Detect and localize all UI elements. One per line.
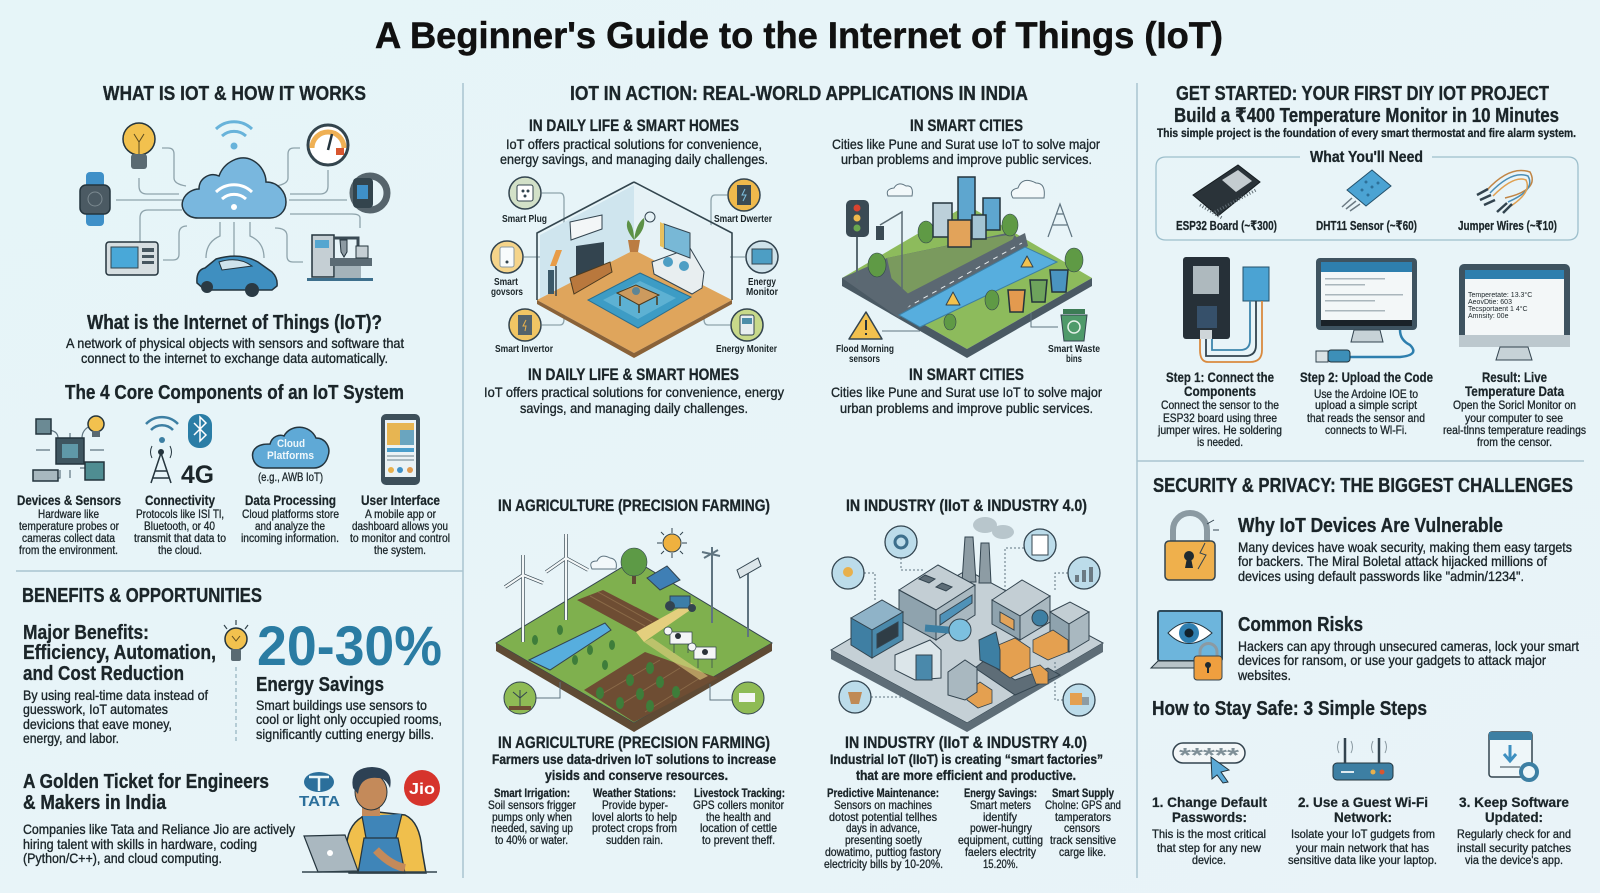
- text: daily life description: IN DAILY LIFE & SMART HOMES: [528, 365, 739, 384]
- icon: ESP32 board: [1193, 165, 1260, 218]
- text: smart supply chain: tamperators: [1055, 810, 1111, 824]
- text: change passwords: that step for any new: [1157, 841, 1261, 855]
- text: weather stations: lovel alorts to help: [592, 810, 677, 824]
- text: smart cities intro: [832, 116, 1100, 167]
- cows: [664, 627, 716, 668]
- icon: password field: [1173, 743, 1245, 783]
- text: energy savings: Energy Savings:: [964, 786, 1037, 800]
- callout: energy monitor: [746, 241, 778, 273]
- text: daily life intro: energy savings, and managing daily challenges.: [500, 151, 768, 167]
- text: livestock tracking: to prevent theff.: [702, 833, 775, 847]
- text: smart irrigation: to 40% or water.: [495, 833, 568, 847]
- logo: Jio: Jio: [409, 781, 435, 798]
- text: definition: connect to the internet to exchange data automatically.: [81, 350, 388, 366]
- AC: [570, 215, 602, 240]
- grey cabinet: [948, 660, 977, 700]
- stat: energy savings: Energy Savings: [256, 674, 384, 696]
- icon: smartwatch right: [353, 176, 387, 210]
- stat: energy savings: significantly cutting energy bills.: [256, 726, 434, 742]
- text: major benefits: Efficiency, Automation,: [23, 642, 216, 664]
- plant: [627, 218, 644, 252]
- text: daily life intro: [500, 116, 768, 167]
- text: result: from the censor.: [1477, 435, 1552, 449]
- illustration: smart factory: [831, 517, 1103, 732]
- buildings: [933, 177, 1000, 247]
- text: industry description: [830, 733, 1103, 783]
- text: smart supply chain: censors: [1064, 821, 1100, 835]
- text: daily life intro: IoT offers practical solutions for convenience,: [506, 136, 762, 152]
- labels: parts: DHT11 Sensor (~₹60): [1316, 218, 1417, 233]
- illustration: result monitor: AeovDtie: 603: [1468, 299, 1512, 306]
- text: energy savings: identify: [983, 810, 1017, 824]
- stat: energy savings: cool or light only occupied rooms,: [256, 711, 442, 727]
- heading: what is IoT: WHAT IS IOT & HOW IT WORKS: [103, 83, 366, 105]
- text: energy savings: faelers electrity: [965, 845, 1036, 859]
- stat: energy savings: Smart buildings use sensors to: [256, 697, 427, 713]
- text: predictive maintenance: electricity bills by 10-20%.: [824, 857, 943, 871]
- text: devices and sensors: Devices & Sensors: [17, 492, 121, 508]
- text: smart irrigation: pumps only when: [492, 810, 572, 824]
- text: agriculture description: yisids and conserve resources.: [545, 767, 728, 783]
- panel: benefits and opportunities: [22, 585, 442, 873]
- panel: what is IoT: [17, 83, 450, 557]
- text: energy savings: Smart meters: [970, 798, 1031, 812]
- text: livestock tracking: the health and: [706, 810, 771, 824]
- text: user interface: dashboard allows you: [352, 519, 448, 533]
- text: predictive maintenance: dowatimo, puttiog fastory: [825, 845, 941, 859]
- text: major benefits: and Cost Reduction: [23, 663, 184, 685]
- text: step 2: Step 2: Upload the Code: [1300, 369, 1433, 385]
- text: why vulnerable: [1238, 515, 1572, 584]
- text: golden ticket: & Makers in India: [23, 792, 167, 814]
- labels: smart city: sensors: [849, 353, 880, 365]
- main factory block: [899, 565, 975, 640]
- text: change passwords: Passwords:: [1172, 809, 1247, 825]
- text: golden ticket: hiring talent with skills in hardware, coding: [23, 836, 257, 852]
- text: daily life intro: IN DAILY LIFE & SMART HOMES: [529, 116, 739, 135]
- text: smart cities intro: IN SMART CITIES: [910, 116, 1023, 135]
- text: change passwords: [1152, 794, 1267, 867]
- text: guest wifi: Network:: [1334, 809, 1392, 825]
- callout: smart invertor: [509, 309, 541, 341]
- text: smart supply chain: [1045, 786, 1121, 859]
- text: change passwords: 1. Change Default: [1152, 794, 1267, 810]
- illustration: IoT network hub: [80, 122, 387, 297]
- text: industry description: Industrial IoT (IIoT) is creating “smart factories”: [830, 751, 1103, 767]
- icon: gauge: [308, 125, 348, 165]
- text: smart cities description: IN SMART CITIES: [909, 365, 1024, 384]
- text: data processing: Cloud platforms store: [242, 507, 339, 521]
- heading: IoT in action: IOT IN ACTION: REAL-WORLD APPLICATIONS IN INDIA: [570, 83, 1028, 105]
- icon: router: [1333, 738, 1393, 780]
- icon: wifi: [216, 122, 252, 136]
- illustration: result monitor: Tecsportaent 1 4°C: [1468, 305, 1528, 313]
- text: step 1: Components: [1184, 383, 1256, 399]
- text: devices and sensors: temperature probes or: [19, 519, 119, 533]
- text: smart cities description: Cities like Pune and Surat use IoT to solve major: [831, 384, 1102, 400]
- text: change passwords: device.: [1192, 853, 1226, 867]
- left machine: [851, 600, 903, 658]
- text: livestock tracking: GPS collers monitor: [693, 798, 784, 812]
- text: smart irrigation: [488, 786, 576, 847]
- heading: industry: IN INDUSTRY (IIoT & INDUSTRY 4.0): [846, 496, 1087, 515]
- text: daily life description: [484, 365, 784, 416]
- text: golden ticket: (Python/C++), and cloud computing.: [23, 850, 222, 866]
- pipeline: [925, 628, 970, 632]
- text: step 1: ESP32 board using three: [1163, 411, 1277, 425]
- icon: control device: [106, 242, 158, 275]
- weather poles: [702, 547, 748, 637]
- labels: smart city: Smart Waste: [1048, 343, 1100, 355]
- right machines: [992, 580, 1089, 652]
- text: connectivity: Protocols like ISI Tl,: [136, 507, 224, 521]
- text: guest wifi: Isolate your IoT gudgets from: [1291, 827, 1435, 841]
- labels: parts: ESP32 Board (~₹300): [1176, 218, 1277, 233]
- text: smart cities intro: Cities like Pune and Surat use IoT to solve major: [832, 136, 1100, 152]
- title: A Beginner's Guide to the Internet of Things (IoT): [375, 15, 1223, 56]
- text: predictive maintenance: presenting soetly: [845, 833, 922, 847]
- text: guest wifi: 2. Use a Guest Wi-Fi: [1298, 794, 1428, 810]
- text: user interface: the system.: [374, 543, 426, 557]
- text: livestock tracking: Livestock Tracking:: [694, 786, 785, 800]
- sofa: [652, 248, 704, 294]
- text: smart irrigation: Smart Irrigation:: [494, 786, 570, 800]
- text: agriculture description: [492, 733, 776, 783]
- labels: parts: Jumper Wires (~₹10): [1458, 218, 1557, 233]
- text: weather stations: sudden rain.: [606, 833, 663, 847]
- icon: phone interface: [381, 414, 420, 485]
- callout: energy moniter: [731, 309, 763, 341]
- panel: security and privacy: [1151, 475, 1579, 867]
- crops: [532, 625, 680, 712]
- text: keep updated: [1457, 794, 1571, 867]
- text: step 2: connects to Wl-Fi.: [1325, 423, 1407, 437]
- text: common risks: devices for ransom, or use your gadgets to attack major: [1238, 652, 1546, 668]
- text: energy savings: equipment, cutting: [958, 833, 1043, 847]
- logo: Jio: [404, 770, 440, 806]
- text: major benefits: [23, 622, 216, 746]
- tree: [621, 548, 647, 584]
- text: step 1: Step 1: Connect the: [1166, 369, 1274, 385]
- labels: smart home: Smart: [494, 276, 518, 288]
- text: weather stations: protect crops from: [592, 821, 677, 835]
- icon: smartwatch left: [80, 172, 110, 226]
- text: common risks: websites.: [1237, 667, 1291, 683]
- heading: stay safe: How to Stay Safe: 3 Simple Steps: [1152, 698, 1427, 720]
- tractor: [665, 596, 696, 612]
- labels: smart home: Smart Dwerter: [714, 213, 772, 225]
- text: predictive maintenance: dotost potential tellhes: [829, 810, 937, 824]
- text: step 2: [1300, 369, 1433, 437]
- panel: what you'll need: [1156, 149, 1578, 240]
- text: step 1: Connect the sensor to the: [1161, 398, 1279, 412]
- labels: smart home: Monitor: [746, 286, 778, 298]
- illustration: smart home: [491, 177, 778, 358]
- illustration: result monitor: Temperetate: 13.3°C: [1468, 291, 1532, 299]
- text: smart supply chain: Cholne: GPS and: [1045, 798, 1121, 812]
- icon: software update: [1489, 732, 1537, 780]
- text: devices and sensors: from the environment.: [19, 543, 118, 557]
- text: weather stations: Provide byper-: [602, 798, 668, 812]
- text: weather stations: Weather Stations:: [593, 786, 676, 800]
- text: energy savings: [958, 786, 1043, 871]
- text: result: your computer to see: [1465, 411, 1563, 425]
- orange crates: [967, 630, 1068, 708]
- panel: IoT in action: [484, 83, 1121, 871]
- warnings: [946, 256, 1033, 305]
- text: connectivity: the cloud.: [158, 543, 202, 557]
- wall art: [645, 212, 690, 258]
- icon: devices and sensors: [33, 416, 104, 481]
- heading: what you'll need: What You'll Need: [1310, 149, 1423, 166]
- icon: car: [197, 256, 277, 297]
- text: major benefits: By using real-time data instead of: [23, 687, 208, 703]
- text: golden ticket: Companies like Tata and Reliance Jio are actively: [23, 821, 295, 837]
- icon: industrial machine: [307, 235, 373, 281]
- text: guest wifi: your main network that has: [1296, 841, 1429, 855]
- text: weather stations: [592, 786, 677, 847]
- heading: benefits: BENEFITS & OPPORTUNITIES: [22, 585, 262, 607]
- text: agriculture description: IN AGRICULTURE (PRECISION FARMING): [498, 733, 770, 752]
- text: smart irrigation: needed, saving up: [491, 821, 573, 835]
- icon: password field: *****: [1179, 745, 1239, 767]
- text: data processing: [241, 492, 339, 545]
- text: major benefits: devicions that eave money,: [23, 716, 172, 732]
- callout: smart plug: [509, 177, 541, 209]
- text: result: [1443, 369, 1586, 449]
- icon: connectivity: [146, 414, 214, 489]
- text: keep updated: Regularly check for and: [1457, 827, 1571, 841]
- tower: [1048, 204, 1072, 237]
- icon: jumper wires: [1477, 170, 1532, 213]
- labels: smart city: [836, 343, 1100, 365]
- text: smart cities description: [831, 365, 1102, 416]
- labels: smart home: Energy Moniter: [716, 343, 777, 355]
- icon: connectivity: 4G: [181, 461, 214, 489]
- text: data processing: Data Processing: [245, 492, 336, 508]
- icon: laptop with eye: [1151, 611, 1222, 680]
- smart bins: [1008, 270, 1068, 312]
- callout: waste bin: [1031, 309, 1087, 341]
- labels: smart home: [491, 213, 778, 355]
- text: connectivity: Connectivity: [145, 492, 215, 508]
- text: energy savings: power-hungry: [970, 821, 1032, 835]
- text: keep updated: install security patches: [1457, 841, 1571, 855]
- text: user interface: to monitor and control: [350, 531, 450, 545]
- rug and table: [588, 273, 691, 328]
- icon: DHT11 sensor: [1342, 170, 1391, 211]
- callout: livestock: [710, 682, 764, 714]
- panel: DIY project: [1156, 83, 1586, 449]
- text: predictive maintenance: days in advance,: [846, 821, 920, 835]
- text: common risks: [1237, 614, 1579, 683]
- callout: smart dwerter: [728, 179, 760, 211]
- river: [529, 623, 611, 670]
- smokestacks and smoke: [962, 517, 1014, 583]
- text: devices and sensors: [17, 492, 121, 557]
- text: definition: [66, 335, 404, 366]
- conveyor: [975, 660, 1060, 695]
- text: why vulnerable: devices using default passwords like "admin/1234".: [1238, 568, 1524, 584]
- dashed connectors: [864, 548, 1068, 700]
- text: result: Temperature Data: [1465, 383, 1564, 399]
- text: smart supply chain: track sensitive: [1050, 833, 1116, 847]
- trees: [868, 214, 1083, 330]
- text: energy savings: 15.20%.: [983, 857, 1018, 871]
- logo: Tata: TATA: [299, 793, 340, 810]
- illustration: step 1 wiring: [1183, 257, 1269, 362]
- illustration: step 2 upload: [1316, 258, 1417, 362]
- text: industry description: IN INDUSTRY (IIoT & INDUSTRY 4.0): [845, 733, 1087, 752]
- icon: central cloud: [182, 158, 286, 218]
- icon: broken padlock: [1165, 513, 1219, 580]
- text: definition: A network of physical objects with sensors and software that: [66, 335, 404, 351]
- icon: cloud platforms: [252, 427, 329, 484]
- logo: Tata: [299, 772, 340, 810]
- text: step 1: jumper wires. He soldering: [1157, 423, 1282, 437]
- text: keep updated: via the device's app.: [1465, 853, 1563, 867]
- traffic light: [846, 200, 902, 290]
- text: smart cities description: urban problems and improve public services.: [840, 400, 1093, 416]
- truck: [979, 632, 1000, 670]
- text: livestock tracking: [693, 786, 785, 847]
- sensor badges: [832, 526, 1100, 716]
- text: step 2: Use the Ardoine IOE to: [1314, 387, 1418, 401]
- labels: parts: [1176, 218, 1557, 233]
- stat: energy savings: [256, 614, 442, 742]
- labels: smart city: Flood Morning: [836, 343, 894, 355]
- icon: bulb: [123, 123, 155, 169]
- text: step 2: upload a simple script: [1315, 398, 1418, 412]
- icon: cloud platforms: (e.g., AWB IoT): [258, 470, 323, 484]
- text: step 1: [1157, 369, 1282, 449]
- text: smart supply chain: carge like.: [1059, 845, 1106, 859]
- text: definition heading: What is the Internet of Things (IoT)?: [87, 312, 382, 334]
- text: connectivity: [134, 492, 226, 557]
- text: golden ticket: A Golden Ticket for Engineers: [23, 771, 269, 793]
- text: guest wifi: [1288, 794, 1437, 867]
- text: major benefits: energy, and labor.: [23, 730, 119, 746]
- text: industry description: that are more efficient and productive.: [856, 767, 1076, 783]
- solar panel: [647, 566, 680, 590]
- cloud: [591, 556, 616, 569]
- wind turbines: [505, 534, 588, 642]
- sun: [657, 528, 687, 558]
- text: smart cities intro: urban problems and improve public services.: [841, 151, 1092, 167]
- text: data processing: incoming information.: [241, 531, 339, 545]
- callout: crop sensor: [504, 682, 560, 714]
- text: connectivity: transmit that data to: [134, 531, 226, 545]
- text: predictive maintenance: Sensors on machines: [834, 798, 932, 812]
- floor lamp: [548, 250, 562, 296]
- heading: core components: The 4 Core Components of an IoT System: [65, 382, 404, 404]
- text: why vulnerable: for backers. The Miral Boletal attack hijacked millions of: [1238, 553, 1547, 569]
- stat: energy savings: 20-30%: [257, 614, 442, 677]
- text: connectivity: Bluetooth, or 40: [144, 519, 215, 533]
- illustration: smart city: [836, 177, 1100, 365]
- river: [899, 247, 1057, 327]
- text: predictive maintenance: [824, 786, 943, 871]
- text: golden ticket: [23, 771, 295, 866]
- soil fields: [584, 652, 718, 722]
- text: livestock tracking: location of cettle: [700, 821, 777, 835]
- labels: smart home: govsors: [491, 286, 523, 298]
- labels: smart home: Smart Plug: [502, 213, 547, 225]
- text: step 2: that reads the sensor and: [1307, 411, 1425, 425]
- icon: cloud platforms: Cloud: [277, 438, 305, 450]
- icon: idea bulb: [224, 620, 248, 742]
- text: daily life description: savings, and managing daily challenges.: [520, 400, 748, 416]
- text: user interface: [350, 492, 450, 557]
- text: why vulnerable: Why IoT Devices Are Vulnerable: [1238, 515, 1503, 537]
- text: guest wifi: sensitive data like your laptop.: [1288, 853, 1437, 867]
- text: result: Result: Live: [1482, 369, 1547, 385]
- illustration: precision farming: [496, 528, 772, 732]
- text: user interface: User Interface: [361, 492, 440, 508]
- text: result: Open the Soricl Monitor on: [1453, 398, 1576, 412]
- road: [842, 232, 1025, 318]
- labels: smart city: bins: [1066, 353, 1082, 365]
- text: predictive maintenance: Predictive Maintenance:: [827, 786, 939, 800]
- callout: flood warning: [849, 312, 920, 339]
- icon: cloud platforms: Platforms: [267, 450, 314, 462]
- text: daily life description: IoT offers practical solutions for convenience, energy: [484, 384, 784, 400]
- text: devices and sensors: Hardware like: [38, 507, 99, 521]
- text: change passwords: This is the most critical: [1152, 827, 1266, 841]
- illustration: engineer with laptop: [302, 767, 437, 873]
- text: major benefits: guesswork, IoT automates: [23, 701, 168, 717]
- illustration: result monitor: Amnsity: 00e: [1468, 313, 1509, 320]
- heading: agriculture: IN AGRICULTURE (PRECISION FARMING): [498, 496, 770, 515]
- text: smart supply chain: Smart Supply: [1052, 786, 1114, 800]
- labels: smart home: Energy: [748, 276, 776, 288]
- text: agriculture description: Farmers use data-driven IoT solutions to increase: [492, 751, 776, 767]
- text: data processing: and analyze the: [255, 519, 325, 533]
- robot arm: [895, 640, 941, 680]
- labels: smart home: Smart Invertor: [495, 343, 553, 355]
- illustration: result monitor: [1459, 264, 1570, 360]
- text: user interface: A mobile app or: [365, 507, 436, 521]
- text: devices and sensors: cameras collect data: [22, 531, 115, 545]
- text: keep updated: Updated:: [1485, 809, 1543, 825]
- clouds: [887, 180, 1044, 198]
- text: major benefits: Major Benefits:: [23, 622, 149, 644]
- TV unit: [570, 242, 612, 294]
- callout: smart govsors: [491, 241, 523, 273]
- text: smart irrigation: Soil sensors frigger: [488, 798, 576, 812]
- text: common risks: Common Risks: [1238, 614, 1363, 636]
- text: keep updated: 3. Keep Software: [1459, 794, 1569, 810]
- text: step 1: is needed.: [1197, 435, 1243, 449]
